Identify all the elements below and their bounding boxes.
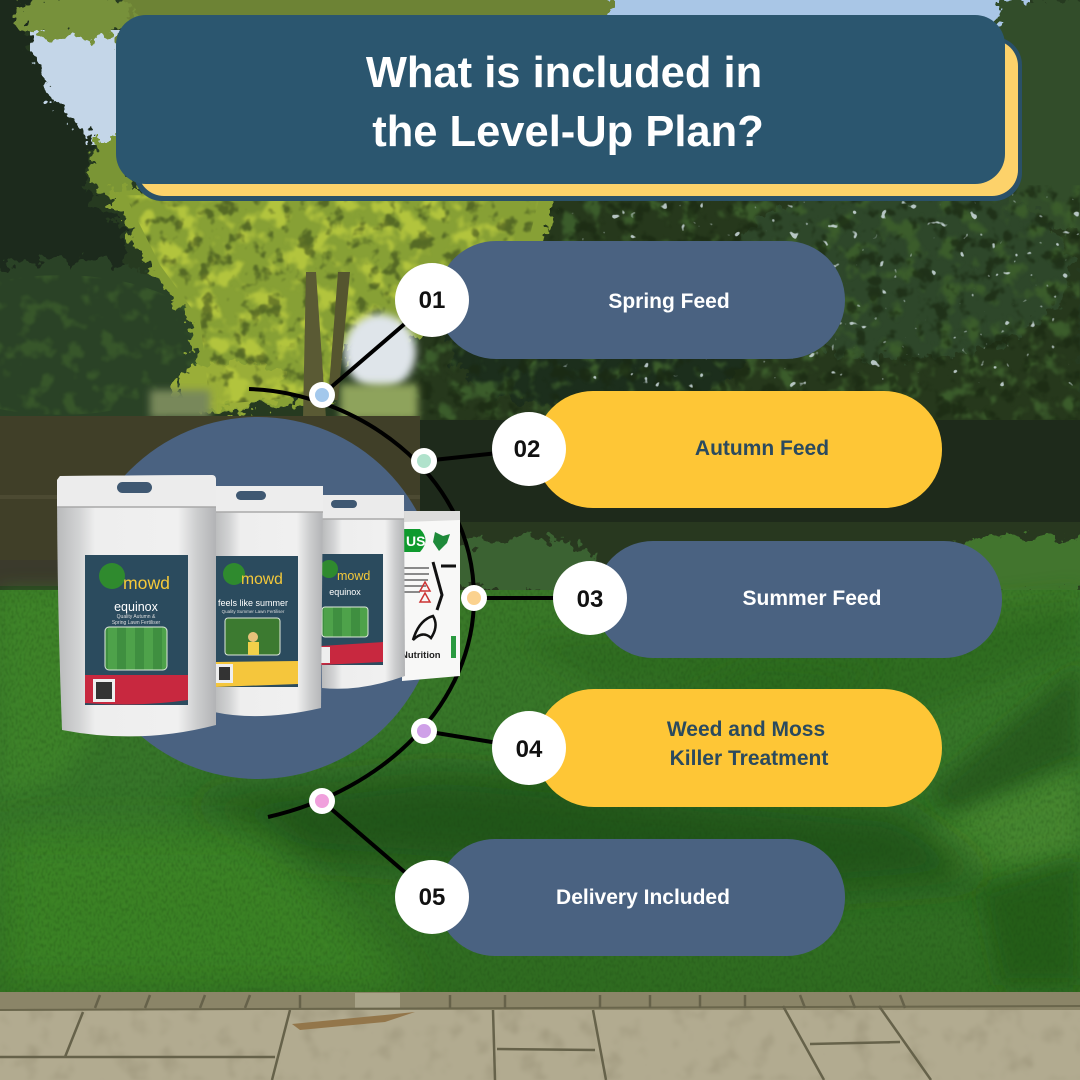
tree trunks xyxy=(303,272,350,418)
product: white sack: Nutrition xyxy=(401,650,441,661)
trees right xyxy=(400,0,1080,430)
sky gap and distant trees xyxy=(150,314,418,420)
item 03: Summer Feed xyxy=(553,541,1002,658)
fence xyxy=(0,416,1080,592)
product: feels like summer bag xyxy=(214,486,323,716)
item 04: Weed and Moss Killer Treatment: Weed and Moss xyxy=(667,718,825,741)
timeline arc xyxy=(249,389,474,817)
product: large equinox bag: Spring Lawn Fertiliser xyxy=(112,620,161,626)
timeline dot 3 xyxy=(461,585,487,611)
connector lines xyxy=(322,321,558,875)
sky xyxy=(30,0,1030,145)
timeline dot 4 xyxy=(411,718,437,744)
paving xyxy=(0,992,1080,1080)
product: small equinox bag: equinox xyxy=(329,587,361,597)
item 04: Weed and Moss Killer Treatment xyxy=(492,689,942,807)
title yellow offset xyxy=(138,40,1018,196)
item 02: Autumn Feed xyxy=(492,391,942,508)
title backing xyxy=(134,37,1022,201)
product: white sack xyxy=(401,511,460,681)
product: small equinox bag xyxy=(320,495,405,689)
shrubs xyxy=(440,536,1080,596)
item 01: Spring Feed: 01 xyxy=(419,287,445,314)
product: feels like summer bag: feels like summer xyxy=(218,598,288,608)
product: feels like summer bag: Quality Summer Lawn Fertiliser xyxy=(222,609,285,614)
timeline dot 2 xyxy=(411,448,437,474)
item 04: Weed and Moss Killer Treatment: Killer Treatment xyxy=(670,747,828,770)
big blue circle behind products xyxy=(77,417,439,779)
item 04: Weed and Moss Killer Treatment: 04 xyxy=(516,736,543,763)
product: large equinox bag: mowd xyxy=(123,573,170,593)
item 01: Spring Feed: Spring Feed xyxy=(608,290,730,313)
item 02: Autumn Feed: Autumn Feed xyxy=(695,437,829,460)
item 01: Spring Feed xyxy=(395,241,845,359)
item 05: Delivery Included xyxy=(395,839,845,956)
title panel xyxy=(116,15,1022,201)
timeline dot 1 xyxy=(309,382,335,408)
title text: What is included in xyxy=(366,49,762,97)
title box xyxy=(116,15,1005,184)
product: large equinox bag: equinox xyxy=(114,600,159,614)
product: small equinox bag: mowd xyxy=(337,569,370,583)
product: feels like summer bag: mowd xyxy=(241,571,283,588)
product: large equinox bag xyxy=(57,475,216,736)
title text: the Level-Up Plan? xyxy=(372,108,764,156)
item 03: Summer Feed: Summer Feed xyxy=(743,587,881,610)
product: large equinox bag: Quality Autumn & xyxy=(117,614,156,620)
lawn xyxy=(0,590,1080,995)
item 03: Summer Feed: 03 xyxy=(577,586,603,613)
yellow-green tree xyxy=(15,0,610,415)
item 05: Delivery Included: 05 xyxy=(419,884,445,911)
item 02: Autumn Feed: 02 xyxy=(514,436,540,463)
timeline dot 5 xyxy=(309,788,335,814)
trees left dark xyxy=(0,0,230,430)
product: white sack: US xyxy=(406,533,425,549)
item 05: Delivery Included: Delivery Included xyxy=(556,886,730,909)
